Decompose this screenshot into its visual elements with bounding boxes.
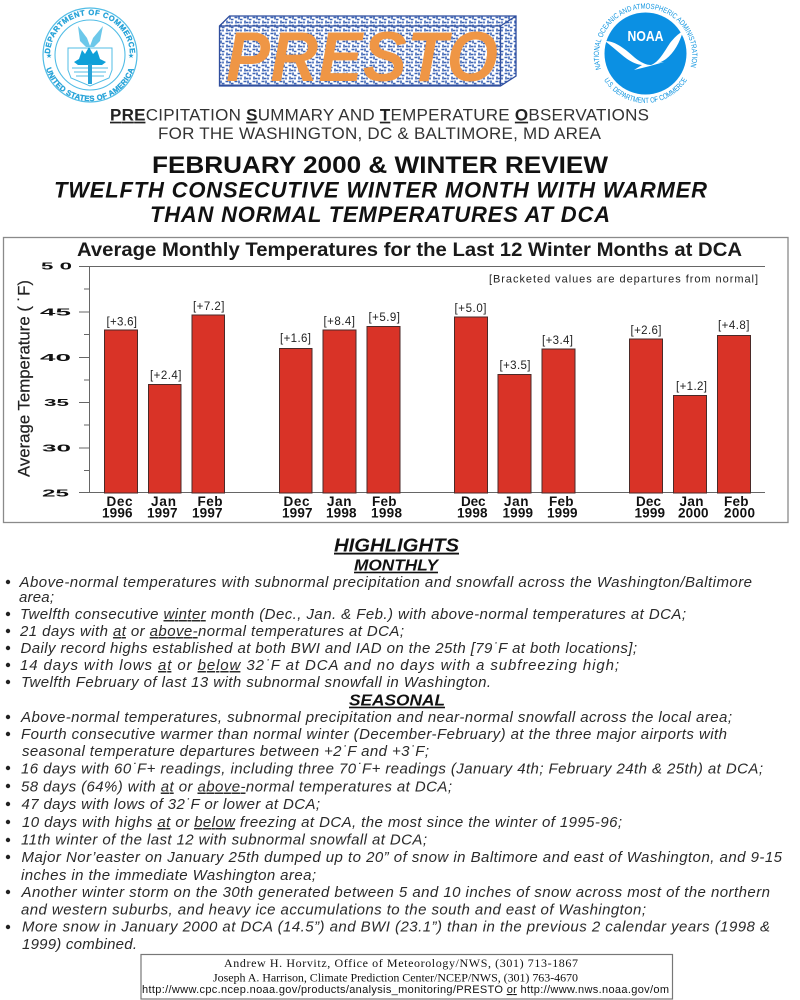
bullet: 47 days: 47 days with lows of 32˙F or lower at DCA; <box>22 796 320 813</box>
panel: contact credits <box>141 954 672 999</box>
logo: Department of Commerce seal: ★ <box>46 52 52 60</box>
y axis: 25 <box>42 488 69 500</box>
bullet: above-normal temperatures: area; <box>19 589 54 606</box>
x axis category labels: 1997 <box>282 506 312 521</box>
text block: seasonal highlights <box>6 709 783 953</box>
y axis <box>40 260 765 500</box>
logo: NOAA: NATIONAL OCEANIC AND ATMOSPHERIC ADMINISTRATION <box>594 3 698 70</box>
bullet: nor'easter: inches in the immediate Washington area; <box>21 867 316 884</box>
bullet: twelfth february: Twelfth February of last 13 with subnormal snowfall in Washington. <box>21 674 491 691</box>
bullet: more snow: 1999) combined. <box>22 936 137 953</box>
x axis category labels: 1997 <box>147 506 178 521</box>
bullet: 16 days with 60F+: 16 days with 60˙F+ readings, including three 70˙F+ readings (January 4th; February 24th & 25th) at DCA; <box>21 760 763 778</box>
panel: contact credits: Andrew H. Horvitz, Office of Meteorology/NWS, (301) 713-1867 <box>224 956 578 970</box>
bullet: fourth consecutive winter <box>6 726 727 760</box>
x axis category labels: 1996 <box>102 506 133 521</box>
x axis category labels: Jan <box>151 494 176 509</box>
heading: program name: FOR THE WASHINGTON, DC & BALTIMORE, MD AREA <box>158 124 602 143</box>
y axis: 5 0 <box>41 260 72 272</box>
bullet: twelfth consecutive winter month: Twelfth consecutive winter month (Dec., Jan. & Feb.) with above-normal temperatures at DCA; <box>20 606 686 623</box>
bar value labels: [+4.8] <box>718 320 750 332</box>
bar value labels: [+2.6] <box>630 325 662 337</box>
x axis category labels: Feb <box>549 494 574 509</box>
bullet: nor'easter <box>6 849 783 884</box>
bar value labels: [+3.4] <box>542 335 573 347</box>
logo: Department of Commerce seal: ★ <box>128 52 134 60</box>
title: FEBRUARY 2000 & WINTER REVIEW <box>152 152 609 179</box>
x axis category labels: Dec <box>461 494 486 509</box>
bullet: fourth consecutive winter: seasonal temperature departures between +2˙F and +3˙F; <box>22 743 429 760</box>
y axis: 40 <box>40 352 71 364</box>
subtitle <box>54 178 707 227</box>
x axis category labels: Jan <box>327 494 352 509</box>
chart note: [Bracketed values are departures from normal] <box>489 274 758 286</box>
bar value labels: [+8.4] <box>324 316 355 328</box>
heading: seasonal: SEASONAL <box>349 693 445 710</box>
bar value labels: [+7.2] <box>193 301 224 313</box>
bullet: daily record highs: Daily record highs established at both BWI and IAD on the 25th [79˙F at both locations]; <box>20 640 637 657</box>
heading: highlights: HIGHLIGHTS <box>334 535 460 556</box>
subtitle: THAN NORMAL TEMPERATURES AT DCA <box>150 202 610 227</box>
heading: program name <box>110 106 649 143</box>
bullet: 10 days: 10 days with highs at or below freezing at DCA, the most since the winter of 1995-96; <box>22 814 622 831</box>
bullet: winter storm <box>6 884 770 918</box>
bullet: more snow <box>6 918 770 953</box>
bar value labels: [+2.4] <box>150 370 182 382</box>
logo: NOAA <box>594 3 698 103</box>
x axis category labels <box>102 494 755 521</box>
x axis category labels: Dec <box>106 494 133 509</box>
bullet: nor'easter: Major Nor’easter on January 25th dumped up to 20” of snow in Baltimore and east of Washington, and 9-15 <box>22 849 783 866</box>
text block: monthly highlights <box>6 574 752 691</box>
heading: monthly: MONTHLY <box>354 558 439 575</box>
bar value labels: [+5.0] <box>454 303 486 315</box>
x axis category labels: Feb <box>724 494 748 509</box>
bullet: 11th winter: 11th winter of the last 12 with subnormal snowfall at DCA; <box>21 832 427 848</box>
y axis: 30 <box>42 442 71 454</box>
bars <box>104 315 750 493</box>
panel: contact credits: http://www.cpc.ncep.noaa.gov/products/analysis_monitoring/PRESTO or http://www.nws.noaa.gov/om <box>142 984 669 996</box>
logo: Department of Commerce seal <box>42 7 138 103</box>
y axis: 45 <box>40 306 71 318</box>
bar value labels: [+1.6] <box>280 333 311 345</box>
bullet: winter storm: Another winter storm on the 30th generated between 5 and 10 inches of snow across most of the northern <box>20 884 770 901</box>
x axis category labels: Dec <box>636 494 661 509</box>
chart title: Average Monthly Temperatures for the Last 12 Winter Months at DCA <box>77 239 742 261</box>
bar value labels <box>106 301 750 393</box>
subtitle: TWELFTH CONSECUTIVE WINTER MONTH WITH WARMER <box>54 178 707 203</box>
logo: Department of Commerce seal: DEPARTMENT OF COMMERCE <box>44 10 136 54</box>
x axis category labels: 1999 <box>547 506 578 521</box>
y axis title: Average Temperature ( ˙F) <box>16 280 34 477</box>
bullet: above-normal temperatures: Above-normal temperatures, subnormal precipitation and near-normal snowfall across the local area; <box>20 709 732 726</box>
x axis category labels: Dec <box>284 494 310 509</box>
bullet: above-normal temperatures: Above-normal temperatures with subnormal precipitation and snowfall across the Washington/Baltimore <box>18 574 752 591</box>
y axis: 35 <box>44 397 69 409</box>
logo: NOAA: NOAA <box>628 28 664 45</box>
x axis category labels: Jan <box>504 494 528 509</box>
bullet: above-normal temperatures <box>6 574 752 606</box>
panel: contact credits: Joseph A. Harrison, Climate Prediction Center/NCEP/NWS, (301) 763-4670 <box>213 970 578 984</box>
logo: Department of Commerce seal: UNITED STATES OF AMERICA <box>46 67 134 102</box>
logo: NOAA: U.S. DEPARTMENT OF COMMERCE <box>604 77 687 103</box>
x axis category labels: 2000 <box>678 506 708 521</box>
bullet: 14 days with lows: 14 days with lows at or below 32˙F at DCA and no days with a subfreezing high; <box>20 657 619 674</box>
x axis category labels: 1998 <box>457 506 488 521</box>
bullet: winter storm: and western suburbs, and heavy ice accumulations to the south and east of Washington; <box>21 902 646 918</box>
bar value labels: [+5.9] <box>368 312 400 324</box>
x axis category labels: Feb <box>372 494 396 509</box>
x axis category labels: Feb <box>198 494 222 509</box>
heading: program name: PRECIPITATION SUMMARY AND TEMPERATURE OBSERVATIONS <box>110 106 649 125</box>
bar value labels: [+1.2] <box>676 381 707 393</box>
x axis category labels: 1998 <box>371 506 402 521</box>
x axis category labels: 1997 <box>192 506 222 521</box>
x axis category labels: 1999 <box>634 506 665 521</box>
bar value labels: [+3.5] <box>500 360 530 372</box>
x axis category labels: 1998 <box>326 506 357 521</box>
panel: temperature chart <box>4 238 788 522</box>
bullet: fourth consecutive winter: Fourth consecutive warmer than normal winter (December-February) at the three major airports with <box>21 726 727 743</box>
bullet: more snow: More snow in January 2000 at DCA (14.5”) and BWI (23.1”) than in the previous 2 calendar years (1998 & <box>22 918 770 936</box>
x axis category labels: Jan <box>680 494 704 509</box>
bullet: 21 days: 21 days with at or above-normal temperatures at DCA; <box>19 623 404 640</box>
x axis category labels: 2000 <box>724 506 755 521</box>
bullet: 58 days: 58 days (64%) with at or above-normal temperatures at DCA; <box>21 778 452 796</box>
bar value labels: [+3.6] <box>106 316 137 328</box>
x axis category labels: 1999 <box>502 506 533 521</box>
logo: PRESTO block: PRESTO <box>226 18 498 96</box>
